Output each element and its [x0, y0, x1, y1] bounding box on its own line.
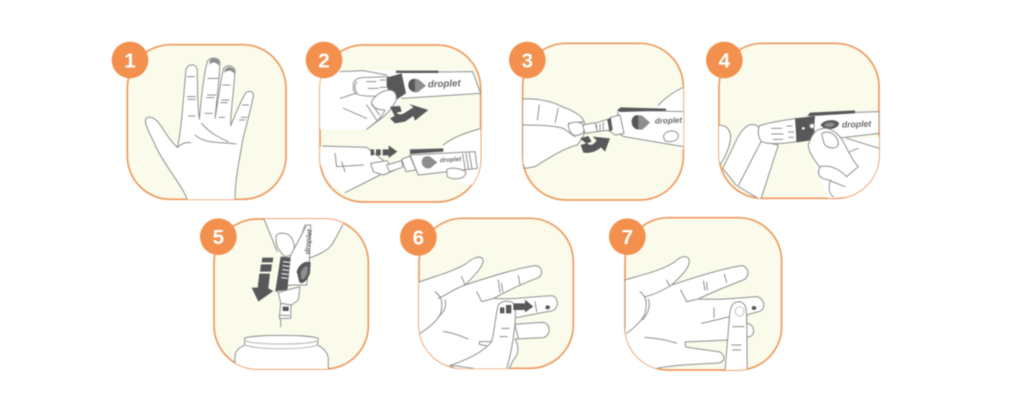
- illustration: hand pressing device above a jar: [235, 218, 343, 370]
- illustration: hands adjusting the device dial: droplet: [842, 119, 872, 130]
- panel: step 3 twist off protective disc: [509, 42, 684, 200]
- panel: step 1 open hand: [112, 42, 286, 200]
- badge: number 5: [200, 218, 237, 255]
- badge: number 1: 1: [124, 49, 136, 72]
- badge: number 3: [509, 42, 546, 78]
- arrow: press downward: [252, 258, 273, 302]
- illustration: open hand with marked fingertips: [145, 58, 253, 200]
- icon: blood drop: [752, 306, 756, 310]
- panel: step 7 pricked finger: [609, 218, 782, 371]
- illustration: twisting the cap off the device: droplet: [428, 78, 462, 90]
- badge: number 7: [609, 218, 646, 255]
- illustration: hands twisting the lancet cover: [523, 86, 684, 168]
- illustration: hands twisting the lancet cover: droplet: [655, 116, 682, 126]
- badge: number 4: 4: [719, 49, 731, 72]
- panel: step 4 adjust depth dial: [706, 42, 879, 200]
- arrow: twist direction: [580, 136, 610, 153]
- illustration: hand with drop of blood on fingertip: [418, 257, 557, 370]
- badge: number 6: 6: [413, 227, 424, 250]
- arrow: push lancet into the device: [371, 145, 397, 158]
- badge: number 2: 2: [318, 49, 330, 72]
- illustration: open jar: [235, 335, 328, 370]
- illustration: hands adjusting the device dial: [718, 110, 879, 200]
- badge: number 2: [306, 42, 342, 78]
- badge: number 3: 3: [522, 49, 533, 72]
- panel: step 2 remove cap and insert lancet: [306, 42, 481, 202]
- arrow: twist direction: [390, 104, 428, 123]
- badge: number 6: [400, 219, 437, 256]
- illustration: hand pressing device above a jar: droplet: [302, 228, 314, 255]
- illustration: inserting the lancet: [320, 129, 481, 193]
- icon: blood drop: [545, 305, 550, 309]
- illustration: hand with finger beside blood drop: [625, 257, 764, 371]
- arrow: squeeze toward fingertip: [500, 300, 533, 313]
- badge: number 7: 7: [622, 226, 633, 249]
- panel: step 5 cocking the device over a jar: [200, 218, 368, 370]
- badge: number 1: [112, 42, 148, 78]
- illustration: twisting the cap off the device: [320, 71, 481, 129]
- illustration: inserting the lancet: droplet: [440, 156, 462, 164]
- badge: number 4: [706, 42, 743, 78]
- badge: number 5: 5: [213, 226, 224, 249]
- panel: step 6 squeeze fingertip: [400, 218, 573, 370]
